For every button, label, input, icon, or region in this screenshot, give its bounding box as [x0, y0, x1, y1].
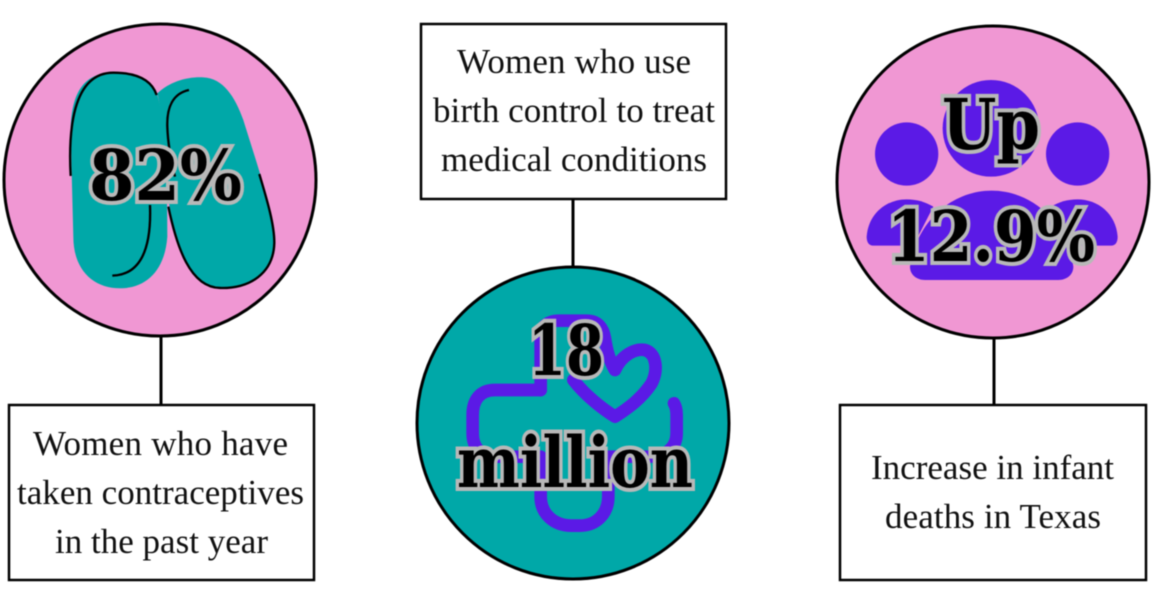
- stat: 18 million: million: [457, 421, 693, 504]
- text box: women who have taken contraceptives: Women who have: [33, 424, 288, 463]
- text box: medical conditions: Women who use: [457, 42, 691, 81]
- stat circle: 18 million: [417, 267, 729, 579]
- text box: women who have taken contraceptives: in the past year: [55, 522, 268, 561]
- stat: 18 million: 18: [528, 309, 604, 392]
- text box: infant deaths in Texas: Increase in infant: [871, 448, 1114, 487]
- stat: 18 million: [457, 309, 693, 504]
- icon: medical cross with heart: [473, 321, 677, 526]
- stat circle: up 12.9%: [837, 26, 1149, 338]
- text box: women who have taken contraceptives: [9, 405, 314, 580]
- panel: contraceptive use: [4, 24, 316, 580]
- stat: up 12.9%: Up: [942, 83, 1040, 166]
- icon: group of people: [867, 80, 1118, 280]
- text box: women who have taken contraceptives: taken contraceptives: [17, 473, 304, 512]
- panel: infant deaths: [837, 26, 1149, 580]
- stat: 82%: 82%: [89, 134, 242, 217]
- text box: medical conditions: [421, 24, 726, 199]
- stat circle: 82%: [4, 24, 316, 336]
- stat: up 12.9%: 12.9%: [887, 195, 1095, 278]
- panel: medical conditions: [417, 24, 729, 579]
- icon: pills: [70, 73, 274, 288]
- text box: infant deaths in Texas: [840, 405, 1146, 580]
- text box: infant deaths in Texas: deaths in Texas: [885, 497, 1101, 536]
- text box: medical conditions: medical conditions: [441, 140, 707, 179]
- text box: medical conditions: birth control to treat: [433, 91, 715, 130]
- stat: up 12.9%: [887, 83, 1095, 278]
